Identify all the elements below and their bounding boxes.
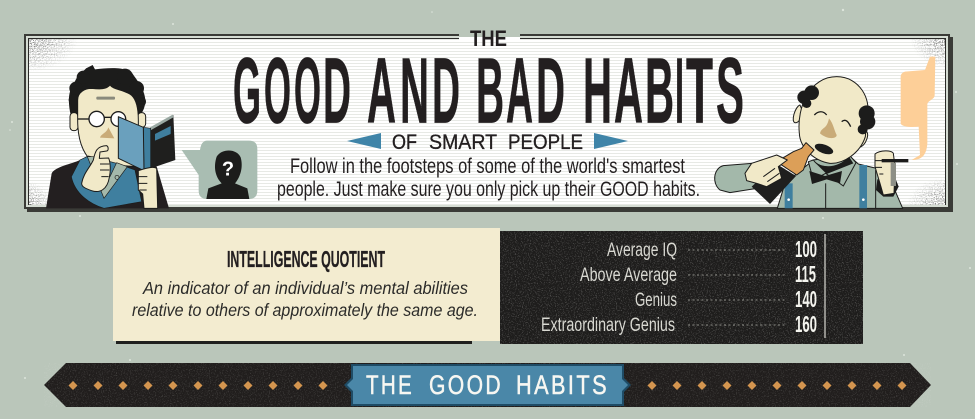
infographic canvas: S <box>716 38 744 142</box>
banner text: THE <box>366 370 414 400</box>
diamonds right <box>648 381 906 390</box>
intro text <box>277 155 700 201</box>
banner text: GOOD <box>429 370 503 400</box>
definition text: An indicator of an individual’s mental abilities <box>142 278 468 298</box>
row labels: Genius <box>635 290 677 311</box>
intro text: Follow in the footsteps of some of the world's smartest <box>290 155 685 178</box>
values: 140 <box>795 286 817 312</box>
title: GOOD AND BAD HABITS: T <box>686 38 713 142</box>
definition text: relative to others of approximately the same age. <box>132 300 478 320</box>
row labels: Above Average <box>580 265 677 286</box>
row labels <box>541 240 677 336</box>
illustration: man reading book <box>46 65 175 208</box>
subtitle: of smart people with arrows: OF <box>392 131 417 154</box>
panel: intelligence quotient definition <box>113 228 500 344</box>
speech bubble with mystery silhouette <box>182 141 257 199</box>
dotted leaders <box>688 250 787 325</box>
subtitle: of smart people with arrows: SMART <box>429 131 497 154</box>
banner text <box>366 370 609 400</box>
values: 100 <box>795 236 817 262</box>
heading: INTELLIGENCE QUOTIENT <box>227 246 385 272</box>
title: GOOD AND BAD HABITS: G <box>233 38 261 142</box>
banner text: HABITS <box>516 370 609 400</box>
title: GOOD AND BAD HABITS: A <box>506 38 533 142</box>
title: GOOD AND BAD HABITS: A <box>614 38 643 142</box>
title: GOOD AND BAD HABITS: N <box>400 38 429 142</box>
row labels: Extraordinary Genius <box>541 315 675 336</box>
title: GOOD AND BAD HABITS: I <box>675 38 684 142</box>
title: GOOD AND BAD HABITS: A <box>367 38 396 142</box>
title: GOOD AND BAD HABITS: O <box>294 38 321 142</box>
title: GOOD AND BAD HABITS: H <box>583 38 612 142</box>
title: GOOD AND BAD HABITS: D <box>536 38 565 142</box>
title: THE: THE <box>470 26 507 51</box>
section banner: the good habits <box>44 363 931 407</box>
title: GOOD AND BAD HABITS: B <box>645 38 674 142</box>
speech bubble with mystery silhouette: ? <box>222 158 234 180</box>
row labels: Average IQ <box>607 240 677 261</box>
values: 160 <box>795 311 817 337</box>
smoke <box>901 57 935 160</box>
title: GOOD AND BAD HABITS <box>233 38 744 142</box>
values: 115 <box>795 261 816 287</box>
definition text <box>132 278 478 320</box>
illustration: man drinking and smoking <box>715 57 935 208</box>
values <box>795 236 817 337</box>
title: GOOD AND BAD HABITS: D <box>432 38 460 142</box>
subtitle: of smart people with arrows: PEOPLE <box>508 131 583 154</box>
panel: IQ scale <box>500 231 863 344</box>
header panel <box>24 33 953 212</box>
intro text: people. Just make sure you only pick up their GOOD habits. <box>277 178 700 201</box>
title: GOOD AND BAD HABITS: B <box>476 38 504 142</box>
subtitle: of smart people with arrows <box>347 131 628 154</box>
diamonds left <box>68 381 328 390</box>
blue plate <box>344 364 631 406</box>
title: GOOD AND BAD HABITS: O <box>264 38 291 142</box>
title: GOOD AND BAD HABITS: D <box>323 38 351 142</box>
